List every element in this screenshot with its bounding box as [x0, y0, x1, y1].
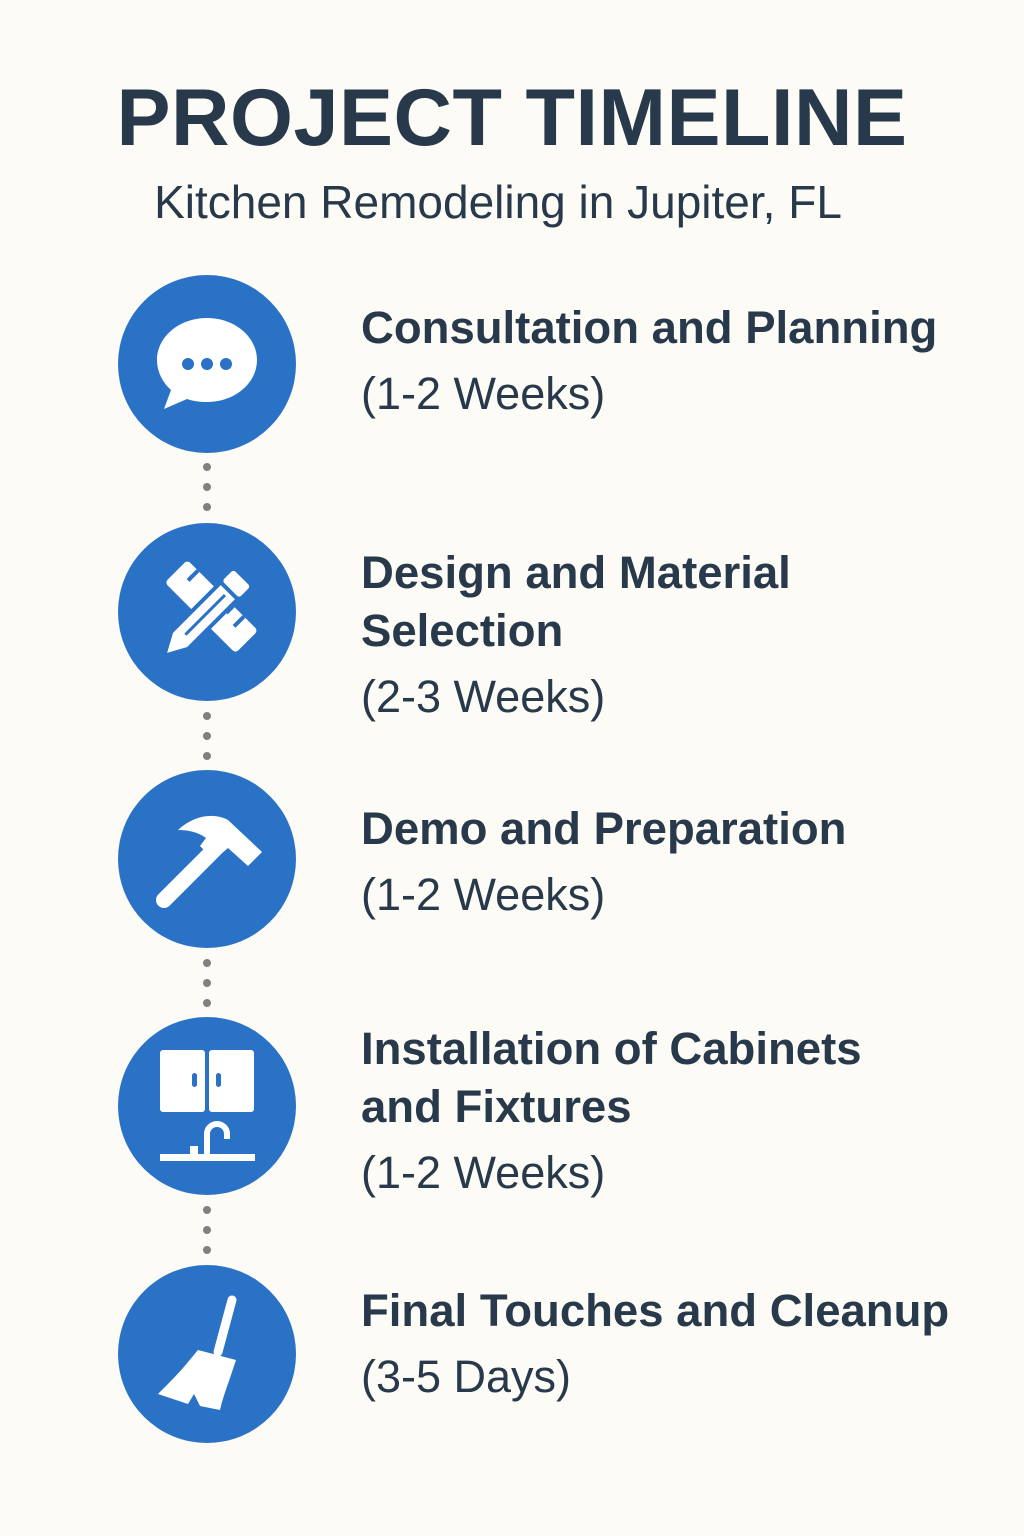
- step 4 text: and Fixtures: [361, 1081, 632, 1132]
- connectors: [203, 463, 211, 1254]
- subtitle: Kitchen Remodeling in Jupiter, FL: [154, 176, 842, 228]
- icon: chat bubble: [118, 275, 296, 453]
- step 2 text: Design and Material: [361, 547, 791, 598]
- step 2 text: (2-3 Weeks): [361, 671, 605, 722]
- step 2 text: Selection: [361, 605, 563, 656]
- title: PROJECT TIMELINE: [116, 73, 908, 163]
- step 5 text: [361, 1285, 949, 1402]
- step 3 text: (1-2 Weeks): [361, 869, 605, 920]
- step 3 text: Demo and Preparation: [361, 803, 846, 854]
- step 1 text: Consultation and Planning: [361, 302, 937, 353]
- icon: broom: [118, 1265, 296, 1443]
- icon: cabinets and sink: [118, 1017, 296, 1195]
- step 3 text: [361, 803, 846, 920]
- step 4 text: (1-2 Weeks): [361, 1147, 605, 1198]
- step 4 text: [361, 1023, 862, 1198]
- step 5 text: Final Touches and Cleanup: [361, 1285, 949, 1336]
- icon: hammer: [118, 770, 296, 948]
- step 1 text: (1-2 Weeks): [361, 368, 605, 419]
- step 1 text: [361, 302, 937, 419]
- step 2 text: [361, 547, 791, 722]
- step 5 text: (3-5 Days): [361, 1351, 571, 1402]
- step 4 text: Installation of Cabinets: [361, 1023, 862, 1074]
- icon: ruler and pencil: [118, 523, 296, 701]
